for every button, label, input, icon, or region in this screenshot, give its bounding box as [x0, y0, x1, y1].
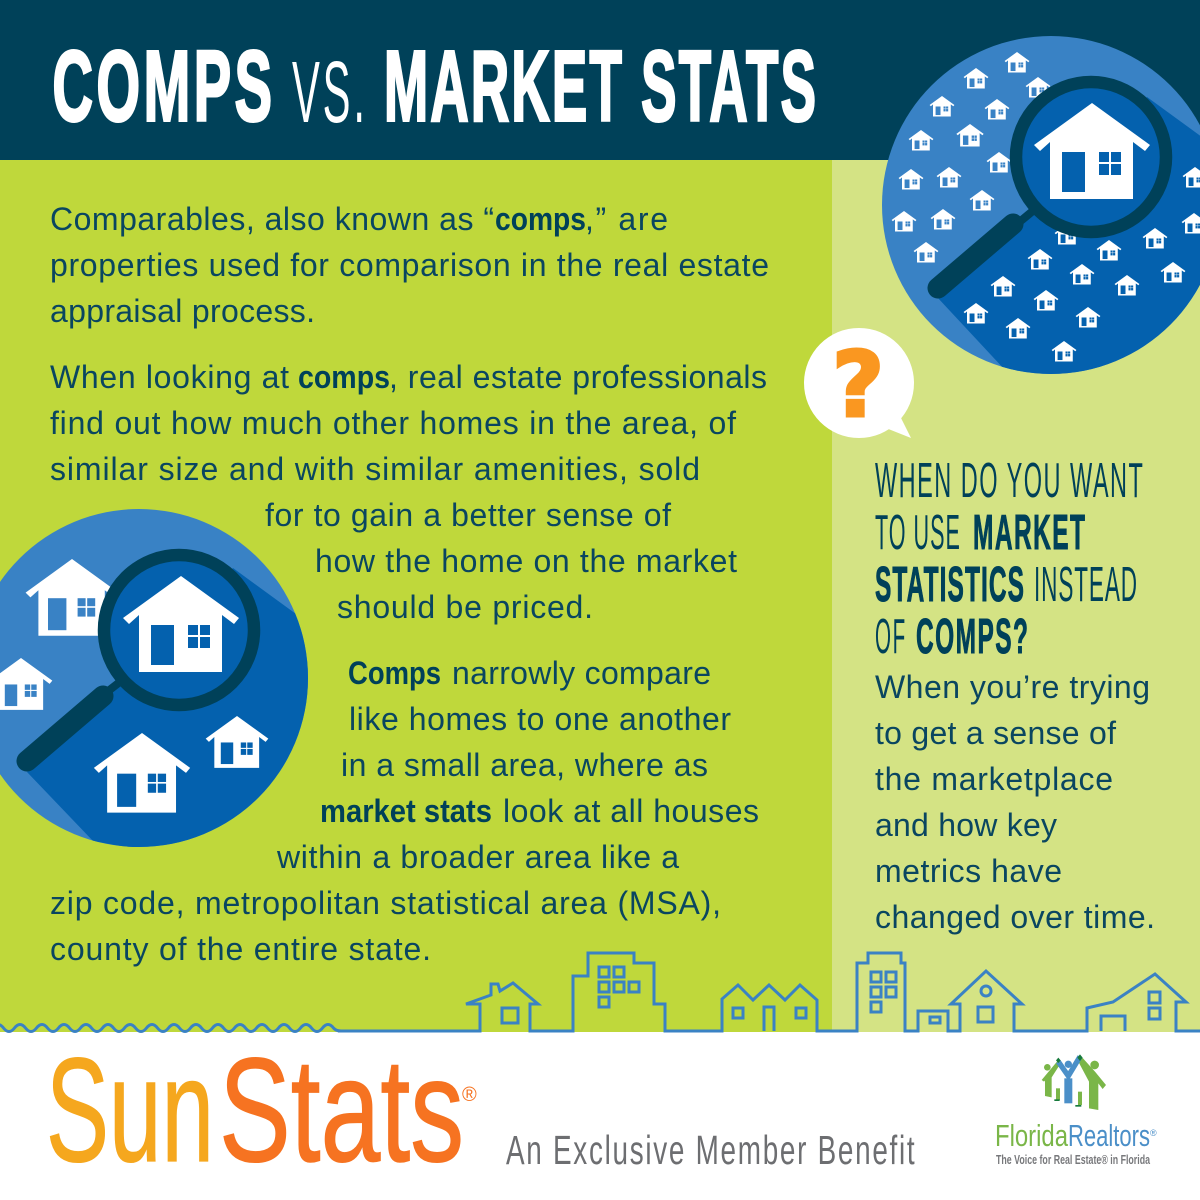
third paragraph: like homes to one another [349, 701, 731, 737]
second paragraph: how the home on the market [315, 543, 737, 579]
third paragraph: narrowly compare [452, 655, 711, 691]
illustration: magnifier over many houses [882, 36, 1200, 374]
right panel answer text: and how key [875, 807, 1057, 843]
right panel answer text: When you’re trying [875, 669, 1150, 705]
right panel heading: STATISTICS [875, 558, 1024, 612]
Florida Realtors logo: ® [1150, 1128, 1157, 1138]
right panel heading: TO USE [875, 506, 960, 561]
right panel answer text: to get a sense of [875, 715, 1116, 751]
SunStats logo: ® [462, 1084, 477, 1106]
right panel heading: OF [875, 609, 905, 663]
Florida Realtors logo: Florida [995, 1118, 1069, 1153]
right panel heading: WHEN DO YOU WANT [875, 454, 1143, 508]
title: VS. [292, 44, 365, 141]
intro paragraph [50, 201, 769, 329]
title: MARKET STATS [384, 31, 816, 142]
second paragraph [50, 359, 767, 625]
second paragraph: comps [298, 359, 390, 395]
intro paragraph: appraisal process. [50, 293, 315, 329]
SunStats logo: Sun [46, 1028, 214, 1193]
third paragraph: county of the entire state. [50, 931, 431, 967]
SunStats logo: Stats [219, 1028, 464, 1193]
third paragraph: zip code, metropolitan statistical area (MSA), [50, 885, 721, 921]
right panel heading: MARKET [973, 506, 1085, 560]
third paragraph: in a small area, where as [341, 747, 708, 783]
main green panel [0, 160, 832, 1032]
right panel heading: INSTEAD [1034, 557, 1137, 613]
footer band [0, 1032, 1200, 1200]
right panel heading [875, 454, 1143, 664]
second paragraph: for to gain a better sense of [265, 497, 671, 533]
right panel answer text: metrics have [875, 853, 1062, 889]
second paragraph: , real estate professionals [389, 359, 767, 395]
third paragraph: Comps [348, 655, 441, 691]
tagline: An Exclusive Member Benefit [506, 1128, 915, 1173]
right panel heading: COMPS? [916, 610, 1028, 664]
icon: people forming houses [1042, 1054, 1106, 1110]
second paragraph: should be priced. [337, 589, 593, 625]
intro paragraph: Comparables, also known as “ [50, 201, 494, 237]
third paragraph: market stats [320, 793, 492, 829]
right light green panel [832, 160, 1200, 1032]
right panel answer text: the marketplace [875, 761, 1113, 797]
second paragraph: When looking at [50, 359, 289, 395]
right panel answer text: changed over time. [875, 899, 1155, 935]
intro paragraph: comps [495, 201, 586, 237]
skyline line art [0, 953, 1200, 1032]
right panel answer text [875, 669, 1155, 935]
Florida Realtors logo: Realtors [1068, 1118, 1150, 1153]
illustration: magnifier over a few houses [0, 509, 308, 847]
intro paragraph: properties used for comparison in the real estate [50, 247, 769, 283]
title [52, 31, 816, 143]
third paragraph: within a broader area like a [276, 839, 679, 875]
intro paragraph: ,” are [585, 201, 668, 237]
third paragraph [50, 655, 759, 967]
second paragraph: similar size and with similar amenities, sold [50, 451, 700, 487]
icon: question mark speech bubble [804, 328, 914, 438]
second paragraph: find out how much other homes in the area, of [50, 405, 736, 441]
Florida Realtors logo [995, 1054, 1157, 1167]
title: COMPS [52, 32, 272, 143]
third paragraph: look at all houses [503, 793, 759, 829]
header band [0, 0, 1200, 160]
SunStats logo [46, 1028, 477, 1193]
icon: question mark speech bubble: ? [832, 333, 884, 438]
